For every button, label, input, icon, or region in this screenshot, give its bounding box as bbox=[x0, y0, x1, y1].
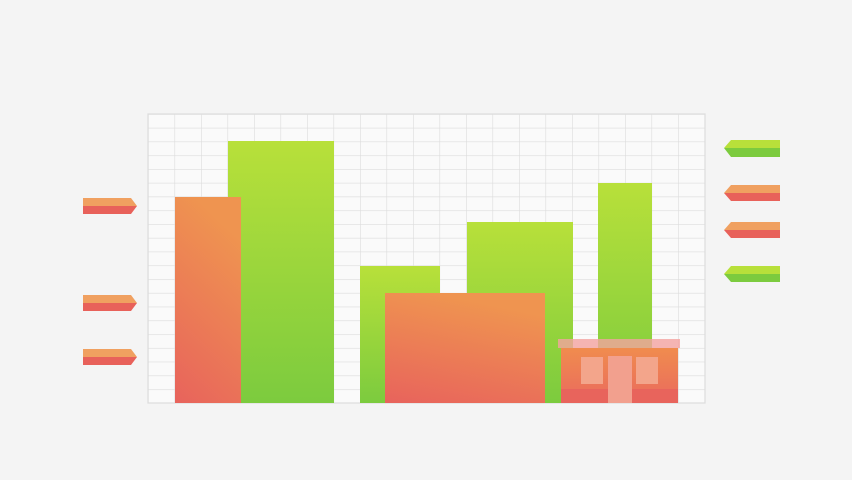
tag: left 2 bbox=[83, 295, 137, 311]
tag: left 3 bbox=[83, 349, 137, 365]
tag: left 1 bbox=[83, 198, 137, 214]
tag: right 2 orange bbox=[724, 185, 780, 201]
tag: right 4 green bbox=[724, 266, 780, 282]
bar: orange 2 bbox=[385, 293, 545, 403]
bar: orange 1 bbox=[175, 197, 241, 403]
tag: right 3 orange bbox=[724, 222, 780, 238]
icon: building bbox=[558, 339, 680, 403]
bar: green 4 bbox=[598, 183, 652, 403]
tag: right 1 green bbox=[724, 140, 780, 157]
bar: green 3 bbox=[467, 222, 573, 403]
bar: green 1 bbox=[228, 141, 334, 403]
bar: green 2 bbox=[360, 266, 440, 403]
chart grid bbox=[148, 114, 705, 403]
